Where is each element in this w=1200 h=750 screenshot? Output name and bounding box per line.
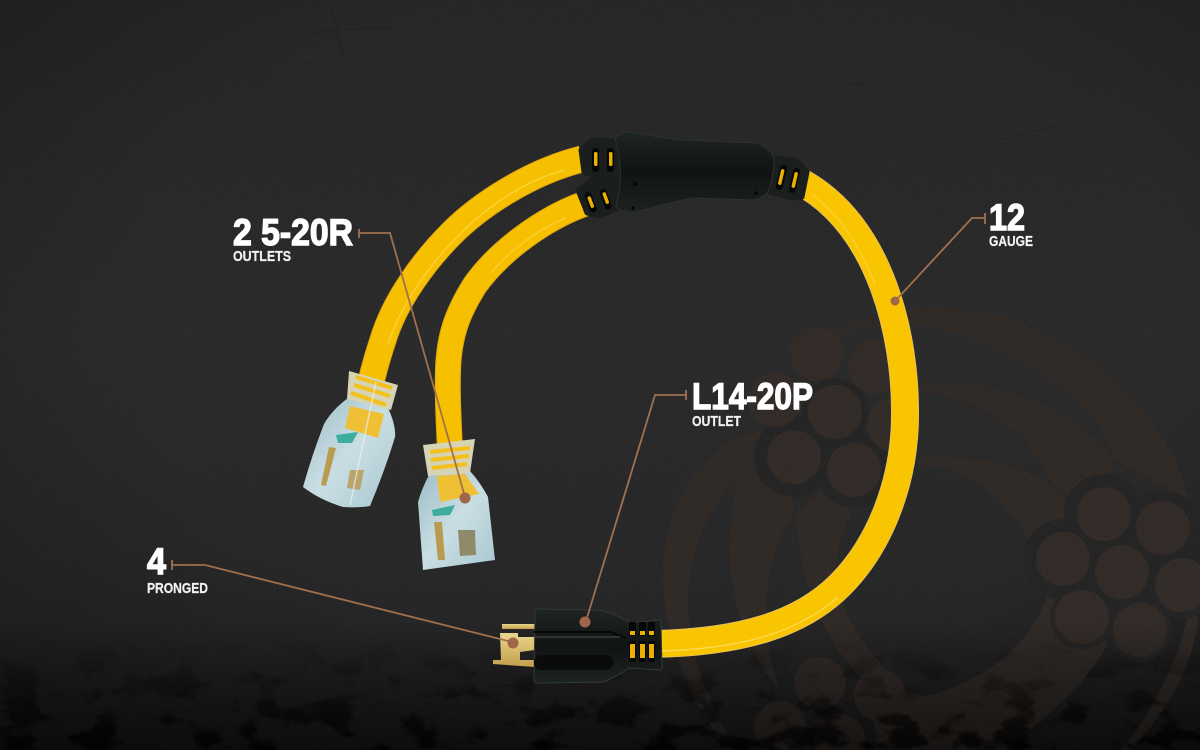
clear body bbox=[303, 398, 395, 507]
label: 2 5-20R outlets: 2 5-20R bbox=[233, 212, 353, 253]
main yellow cable bbox=[655, 180, 905, 651]
yellow inner core bbox=[437, 474, 479, 502]
vent slots bbox=[629, 622, 655, 662]
label: 4 pronged: 4 bbox=[147, 541, 166, 582]
body grooves bbox=[534, 632, 626, 638]
swoosh bands bbox=[663, 308, 1198, 750]
leader: 4 pronged bbox=[172, 560, 518, 648]
strain relief: lower left bbox=[578, 180, 622, 216]
label: 12 gauge: 12 bbox=[989, 197, 1025, 238]
label: 2 5-20R outlets: OUTLETS bbox=[233, 248, 291, 265]
cord bbox=[371, 159, 905, 651]
brass prongs bbox=[493, 624, 535, 667]
label: L14-20P outlet: L14-20P bbox=[692, 376, 813, 417]
lower branch cable bbox=[448, 204, 584, 450]
watermark logo bbox=[663, 308, 1200, 750]
clear body bbox=[418, 471, 495, 570]
leader: L14-20P bbox=[580, 390, 686, 628]
clear collar with ribs bbox=[423, 439, 475, 476]
dark halos behind circle clusters bbox=[754, 378, 1200, 662]
plug body bbox=[534, 609, 662, 683]
brass contacts bbox=[434, 522, 445, 560]
clear collar with ribs bbox=[347, 371, 398, 410]
label: 12 gauge: GAUGE bbox=[989, 233, 1033, 250]
label: 4 pronged bbox=[147, 541, 208, 597]
socket: lower clear connector bbox=[418, 439, 495, 570]
strain relief: upper left bbox=[581, 140, 628, 178]
teal insert bbox=[336, 432, 358, 443]
label: 4 pronged: PRONGED bbox=[147, 580, 208, 597]
plug: L14-20P bbox=[493, 609, 662, 683]
upper branch cable bbox=[371, 159, 582, 382]
bottom darkening bbox=[0, 620, 1200, 750]
splitter housing bbox=[578, 132, 807, 216]
yellow inner core bbox=[345, 406, 384, 438]
label: L14-20P outlet bbox=[692, 376, 813, 430]
leader: 2 5-20R bbox=[359, 229, 470, 504]
socket: upper left clear connector bbox=[303, 371, 398, 507]
leader: 12 gauge bbox=[890, 213, 985, 306]
lower recessed grip bbox=[534, 655, 613, 670]
label: L14-20P outlet: OUTLET bbox=[692, 413, 741, 430]
grunge blotches along bottom bbox=[2, 674, 1200, 750]
molded body bbox=[615, 132, 774, 213]
center ridge bbox=[350, 382, 376, 505]
circle clusters bbox=[748, 327, 1200, 750]
brass contacts bbox=[321, 447, 336, 486]
teal insert bbox=[432, 505, 455, 516]
yellow vents bbox=[630, 631, 654, 658]
strain relief: right bbox=[770, 158, 807, 198]
